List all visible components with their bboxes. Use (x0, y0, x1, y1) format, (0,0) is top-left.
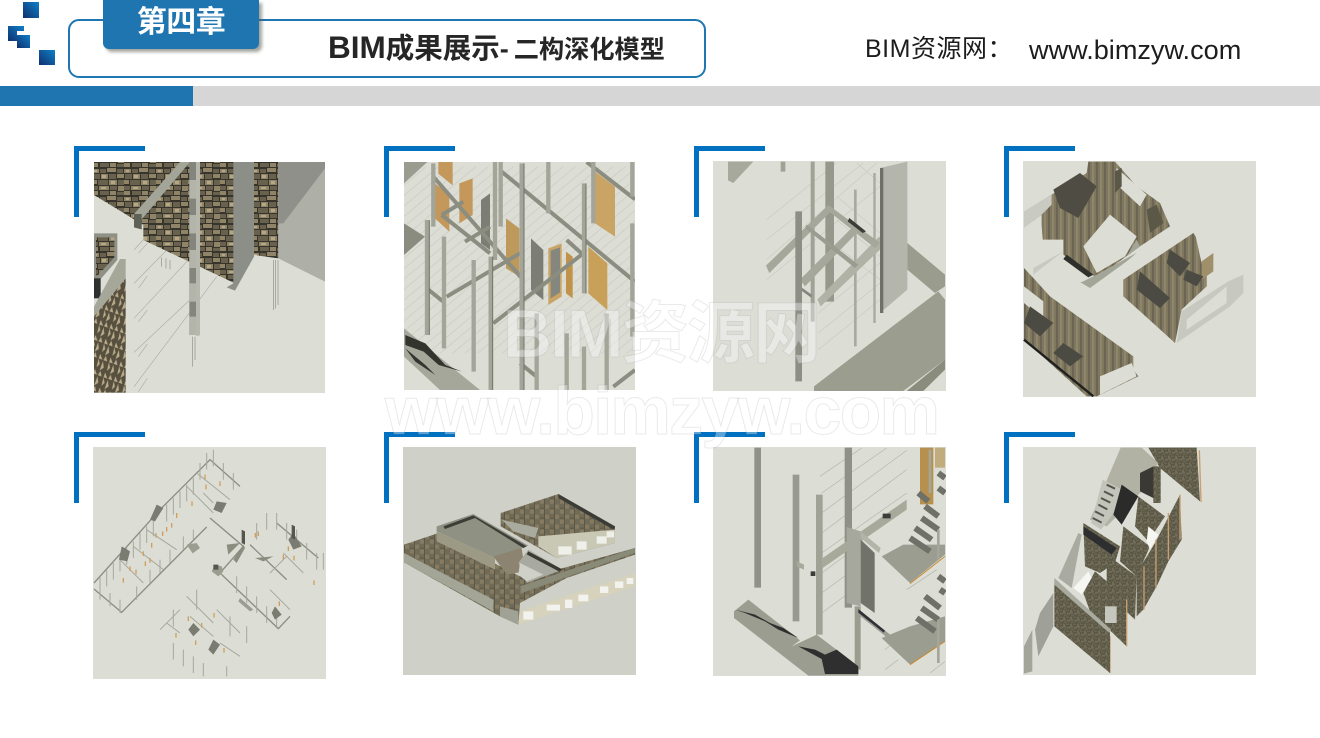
panel 2: columns, beams and orange panels (404, 162, 635, 390)
panel 5: isometric structural frame plan (93, 447, 326, 679)
bracket 1 (74, 146, 145, 217)
header title frame (68, 19, 706, 78)
site label: BIM资源网: BIM资源网： (865, 35, 1013, 63)
bracket 7 (694, 432, 765, 503)
logo: decorative blue squares (8, 2, 55, 65)
bracket 6 (384, 432, 455, 503)
panel 3: column and beam junction model (713, 161, 946, 391)
site label: BIM资源网: www.bimzyw.com (1029, 34, 1241, 65)
panel 1: stone wall and column model (94, 162, 325, 393)
heading: BIM成果展示-二构深化模型: BIM成果展示-二构深化模型 (328, 29, 665, 65)
bracket 4 (1004, 146, 1075, 217)
bracket 2 (384, 146, 455, 217)
chapter tab: 第四章 (103, 0, 259, 49)
bracket 8 (1004, 432, 1075, 503)
bracket 3 (694, 146, 765, 217)
watermark: BIM资源网 www.bimzyw.com (384, 296, 940, 449)
watermark: BIM资源网 www.bimzyw.com: www.bimzyw.com (384, 373, 940, 449)
panel 7: columns and stair model (713, 447, 946, 676)
header bar (0, 86, 1320, 106)
watermark: BIM资源网 www.bimzyw.com: BIM资源网 (503, 296, 821, 372)
panel 6: full building isometric model (403, 447, 636, 675)
panel 8: stone-walled stairwell model (1023, 447, 1256, 675)
bracket 5 (74, 432, 145, 503)
chapter tab: 第四章: 第四章 (137, 6, 225, 39)
site label: BIM资源网 (865, 34, 1241, 65)
panel 4: isometric floor plan with walls (1023, 161, 1256, 397)
